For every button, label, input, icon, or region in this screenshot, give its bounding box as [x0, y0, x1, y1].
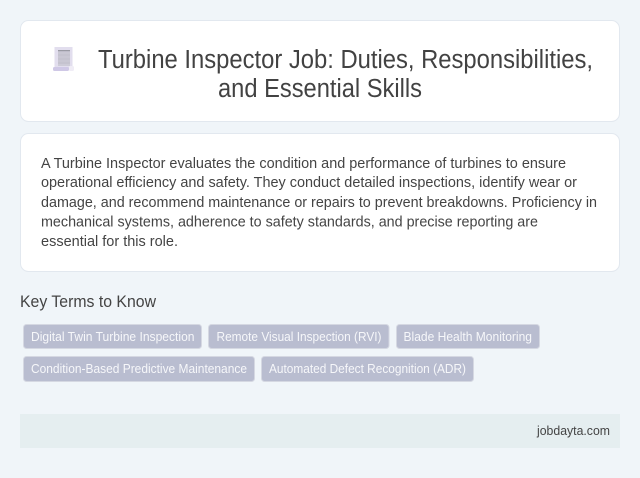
- title: Turbine Inspector Job: Duties, Responsibilities,: [98, 46, 593, 74]
- panel: description card: [20, 134, 620, 272]
- text block: description: operational efficiency and safety. They conduct detailed inspections, identify wear or: [41, 175, 577, 191]
- tag group: key terms: [24, 324, 540, 382]
- tag: condition-based: [24, 356, 254, 382]
- text block: description: damage, and recommend maintenance or repairs to prevent breakdowns. Proficiency in: [41, 195, 597, 211]
- tag: automated defect: [262, 356, 474, 382]
- text block: description: mechanical systems, adherence to safety standards, and precise reporting are: [41, 214, 538, 230]
- tag: blade health: [396, 324, 540, 348]
- text block: description: [41, 156, 597, 250]
- tag: digital twin: [24, 324, 202, 348]
- tag: blade health: Blade Health Monitoring: [404, 329, 532, 344]
- text block: description: A Turbine Inspector evaluates the condition and performance of turbines to ensure: [41, 156, 566, 172]
- tag: condition-based: Condition-Based Predictive Maintenance: [31, 361, 247, 376]
- title: [98, 46, 593, 103]
- icon: document scroll: [53, 47, 74, 71]
- footer text: jobdayta.com: [536, 423, 610, 438]
- panel: title card: [20, 20, 620, 122]
- tag: remote visual inspection: [208, 324, 389, 348]
- title: and Essential Skills: [218, 75, 422, 103]
- tag: remote visual inspection: Remote Visual Inspection (RVI): [216, 329, 382, 344]
- tag: digital twin: Digital Twin Turbine Inspection: [31, 329, 194, 344]
- footer bar: [20, 414, 620, 448]
- tag: automated defect: Automated Defect Recognition (ADR): [269, 361, 466, 376]
- heading: key terms: Key Terms to Know: [20, 293, 156, 311]
- text block: description: essential for this role.: [41, 234, 178, 250]
